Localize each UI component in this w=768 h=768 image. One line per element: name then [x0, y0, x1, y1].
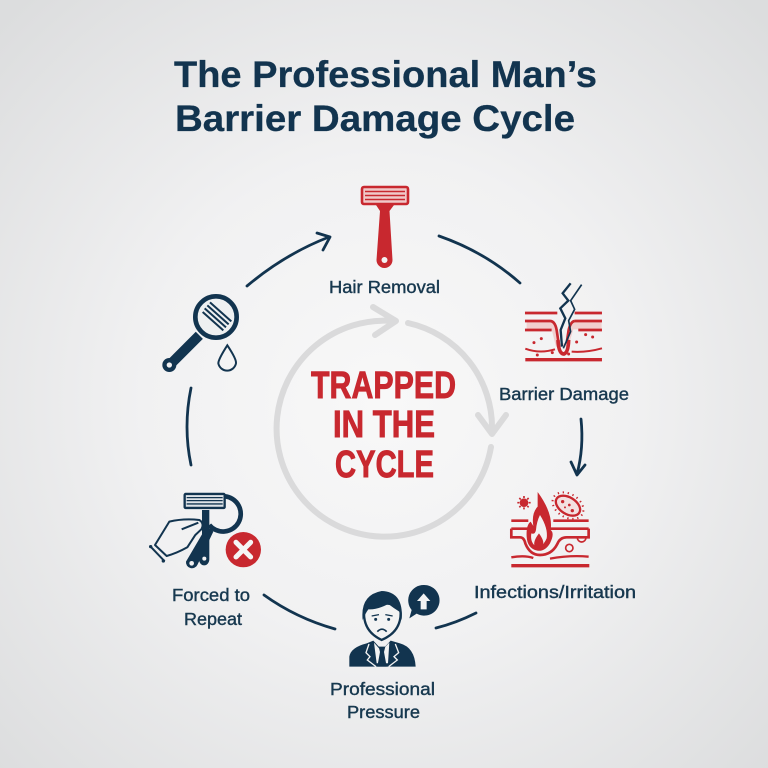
label: infections/irritation: Infections/Irritation: [474, 582, 636, 602]
label: barrier damage: Barrier Damage: [499, 384, 629, 404]
label: hair removal: Hair Removal: [329, 277, 440, 297]
step: forced to repeat: [149, 494, 261, 629]
label: professional pressure: Professional: [330, 679, 435, 699]
arrow: professional pressure to forced to repeat: [264, 595, 335, 629]
center text: trapped in the cycle: TRAPPED: [311, 365, 456, 407]
title: Barrier Damage Cycle: [175, 97, 575, 139]
icon: flame and bacteria on skin: [511, 487, 589, 566]
icon: stressed professional with up-arrow bubble: [349, 585, 440, 667]
title: The Professional Man’s: [174, 53, 597, 95]
arrow: infections to professional pressure: [436, 613, 476, 628]
step: infections/irritation: [474, 487, 636, 602]
title: [174, 53, 597, 139]
icon: magnifier with razor blade: [162, 296, 237, 372]
icon: hand holding razors with red x: [149, 494, 261, 568]
arrow: barrier damage to infections: [571, 419, 585, 475]
icon: water drop: [218, 345, 236, 371]
label: forced to repeat: Forced to: [172, 585, 250, 605]
step: hair removal: [329, 187, 440, 297]
label: professional pressure: Pressure: [347, 702, 420, 722]
arrow: hair removal to barrier damage: [439, 236, 520, 283]
step: razor inspection icon: [162, 296, 237, 372]
label: forced to repeat: [172, 585, 250, 629]
icon: cracked skin layers: [525, 283, 602, 360]
step: professional pressure: [330, 585, 440, 722]
step: barrier damage: [499, 283, 629, 404]
label: forced to repeat: Repeat: [184, 609, 242, 629]
center text: trapped in the cycle: [311, 365, 456, 486]
icon: razor: [362, 187, 408, 268]
arrow: inspection to hair removal: [247, 233, 330, 286]
central grey cycle ring: [277, 307, 506, 537]
center text: trapped in the cycle: IN THE: [333, 404, 435, 446]
label: professional pressure: [330, 679, 435, 722]
arrow: forced to repeat to inspection: [187, 388, 191, 465]
center text: trapped in the cycle: CYCLE: [335, 444, 434, 486]
